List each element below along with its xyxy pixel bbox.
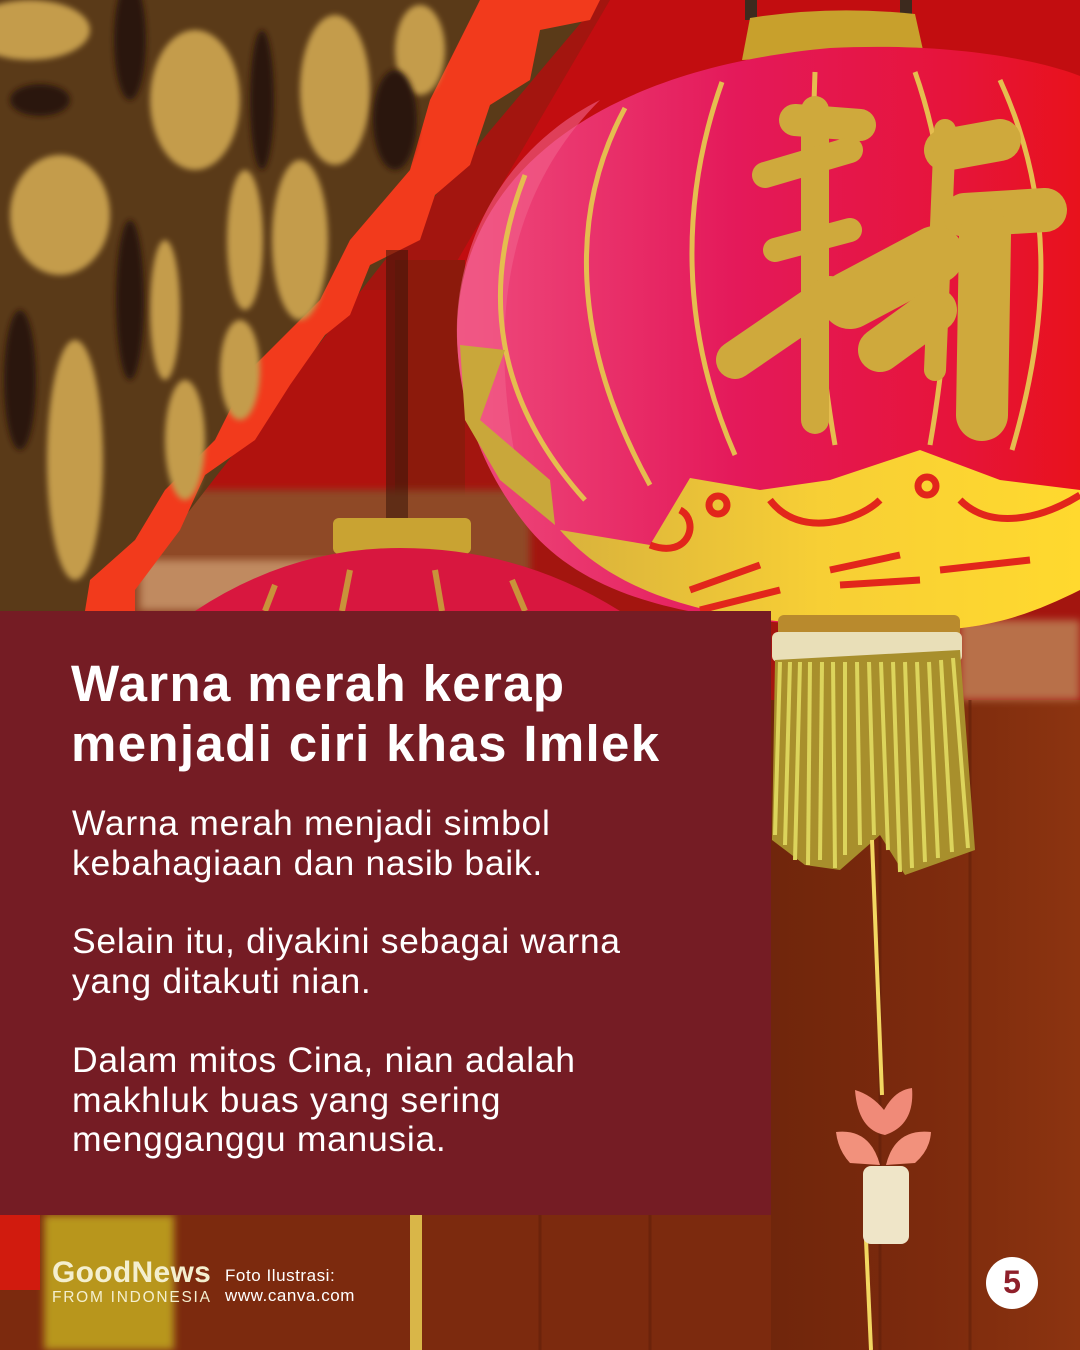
cord — [872, 840, 882, 1095]
text block: paragraph three: makhluk buas yang sering — [72, 1080, 501, 1120]
charm — [836, 1088, 931, 1244]
gold character — [735, 110, 1045, 420]
text block: paragraph one — [72, 803, 551, 882]
text block: paragraph two: Selain itu, diyakini sebagai warna — [72, 921, 621, 961]
text block: paragraph three: mengganggu manusia. — [72, 1119, 446, 1159]
title: Warna merah kerap — [71, 655, 565, 712]
photo credit — [225, 1266, 355, 1305]
title: menjadi ciri khas Imlek — [71, 715, 660, 772]
text block: paragraph two — [72, 921, 621, 1000]
text block: paragraph one: kebahagiaan dan nasib baik. — [72, 842, 543, 882]
lower lantern — [386, 250, 408, 518]
main lantern — [457, 0, 1080, 630]
bottom blurred lantern tassel — [0, 1215, 422, 1350]
stepped red trim — [85, 0, 600, 611]
page number badge — [986, 1257, 1038, 1309]
photo credit: www.canva.com — [225, 1286, 355, 1305]
text block: paragraph three — [72, 1040, 576, 1159]
title — [71, 655, 660, 772]
lantern lower gold band — [560, 450, 1080, 630]
lantern gold ribs — [500, 72, 1041, 500]
ornate carved beam — [0, 0, 600, 611]
page number badge: 5 — [1003, 1264, 1021, 1300]
tassel collar — [778, 615, 960, 643]
text block: paragraph one: Warna merah menjadi simbol — [72, 803, 551, 843]
photo credit: Foto Ilustrasi: — [225, 1266, 335, 1285]
logo: FROM INDONESIA — [52, 1289, 212, 1306]
panel: text background — [0, 611, 771, 1215]
logo: GoodNews — [52, 1256, 211, 1289]
text block: paragraph three: Dalam mitos Cina, nian adalah — [72, 1040, 576, 1080]
logo — [52, 1256, 212, 1306]
tassel — [772, 650, 975, 875]
text block: paragraph two: yang ditakuti nian. — [72, 960, 371, 1000]
